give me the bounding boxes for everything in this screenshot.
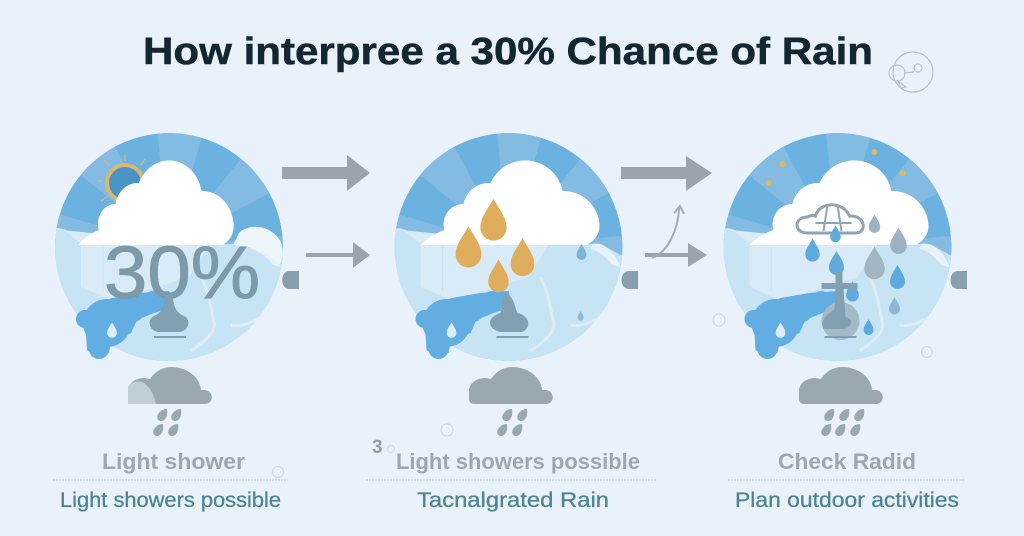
panel: drops circle — [392, 133, 624, 363]
small circles — [272, 314, 932, 478]
arrow: top first — [282, 155, 370, 191]
arrow: bottom second — [645, 243, 707, 267]
icon: fountain — [490, 293, 528, 338]
icon: small rain cloud one — [128, 367, 212, 436]
tab: first circle — [282, 271, 299, 289]
tab: second circle — [622, 271, 638, 289]
arrow: bottom first — [306, 242, 370, 268]
gold stars — [766, 149, 906, 186]
dotted dividers — [53, 479, 964, 481]
heading: light showers possible: Light showers possible — [396, 449, 640, 474]
small blue drops — [577, 244, 586, 321]
caption: light showers possible: Light showers possible — [60, 489, 281, 512]
icon: fountain — [150, 295, 188, 338]
icon: small rain cloud two — [469, 367, 553, 436]
heading: check radid: Check Radid — [778, 449, 916, 474]
caption: tacnalgrated rain: Tacnalgrated Rain — [417, 489, 609, 512]
panel: 30 percent circle — [53, 133, 285, 363]
tab: third circle — [950, 271, 967, 289]
arrow: curved upward — [652, 206, 684, 258]
arrow: top second — [621, 156, 712, 191]
cloud — [420, 160, 600, 245]
panel: radar circle — [722, 133, 954, 363]
caption: plan outdoor activities: Plan outdoor activities — [735, 489, 959, 512]
icon: outlined cloud — [797, 205, 863, 233]
icon: globe outline — [889, 52, 933, 92]
cloud — [78, 160, 283, 265]
gold drops — [456, 199, 534, 292]
title: How interpree a 30% Chance of Rain — [143, 31, 873, 73]
step number: 3 — [372, 437, 383, 458]
icon: sun — [97, 155, 145, 201]
cloud — [750, 160, 928, 245]
30 percent figure: 30% — [104, 231, 260, 314]
heading: light shower: Light shower — [102, 449, 245, 474]
blue and grey drops — [805, 215, 907, 335]
icon: fountain — [822, 272, 860, 340]
icon: small rain cloud three — [799, 367, 883, 436]
